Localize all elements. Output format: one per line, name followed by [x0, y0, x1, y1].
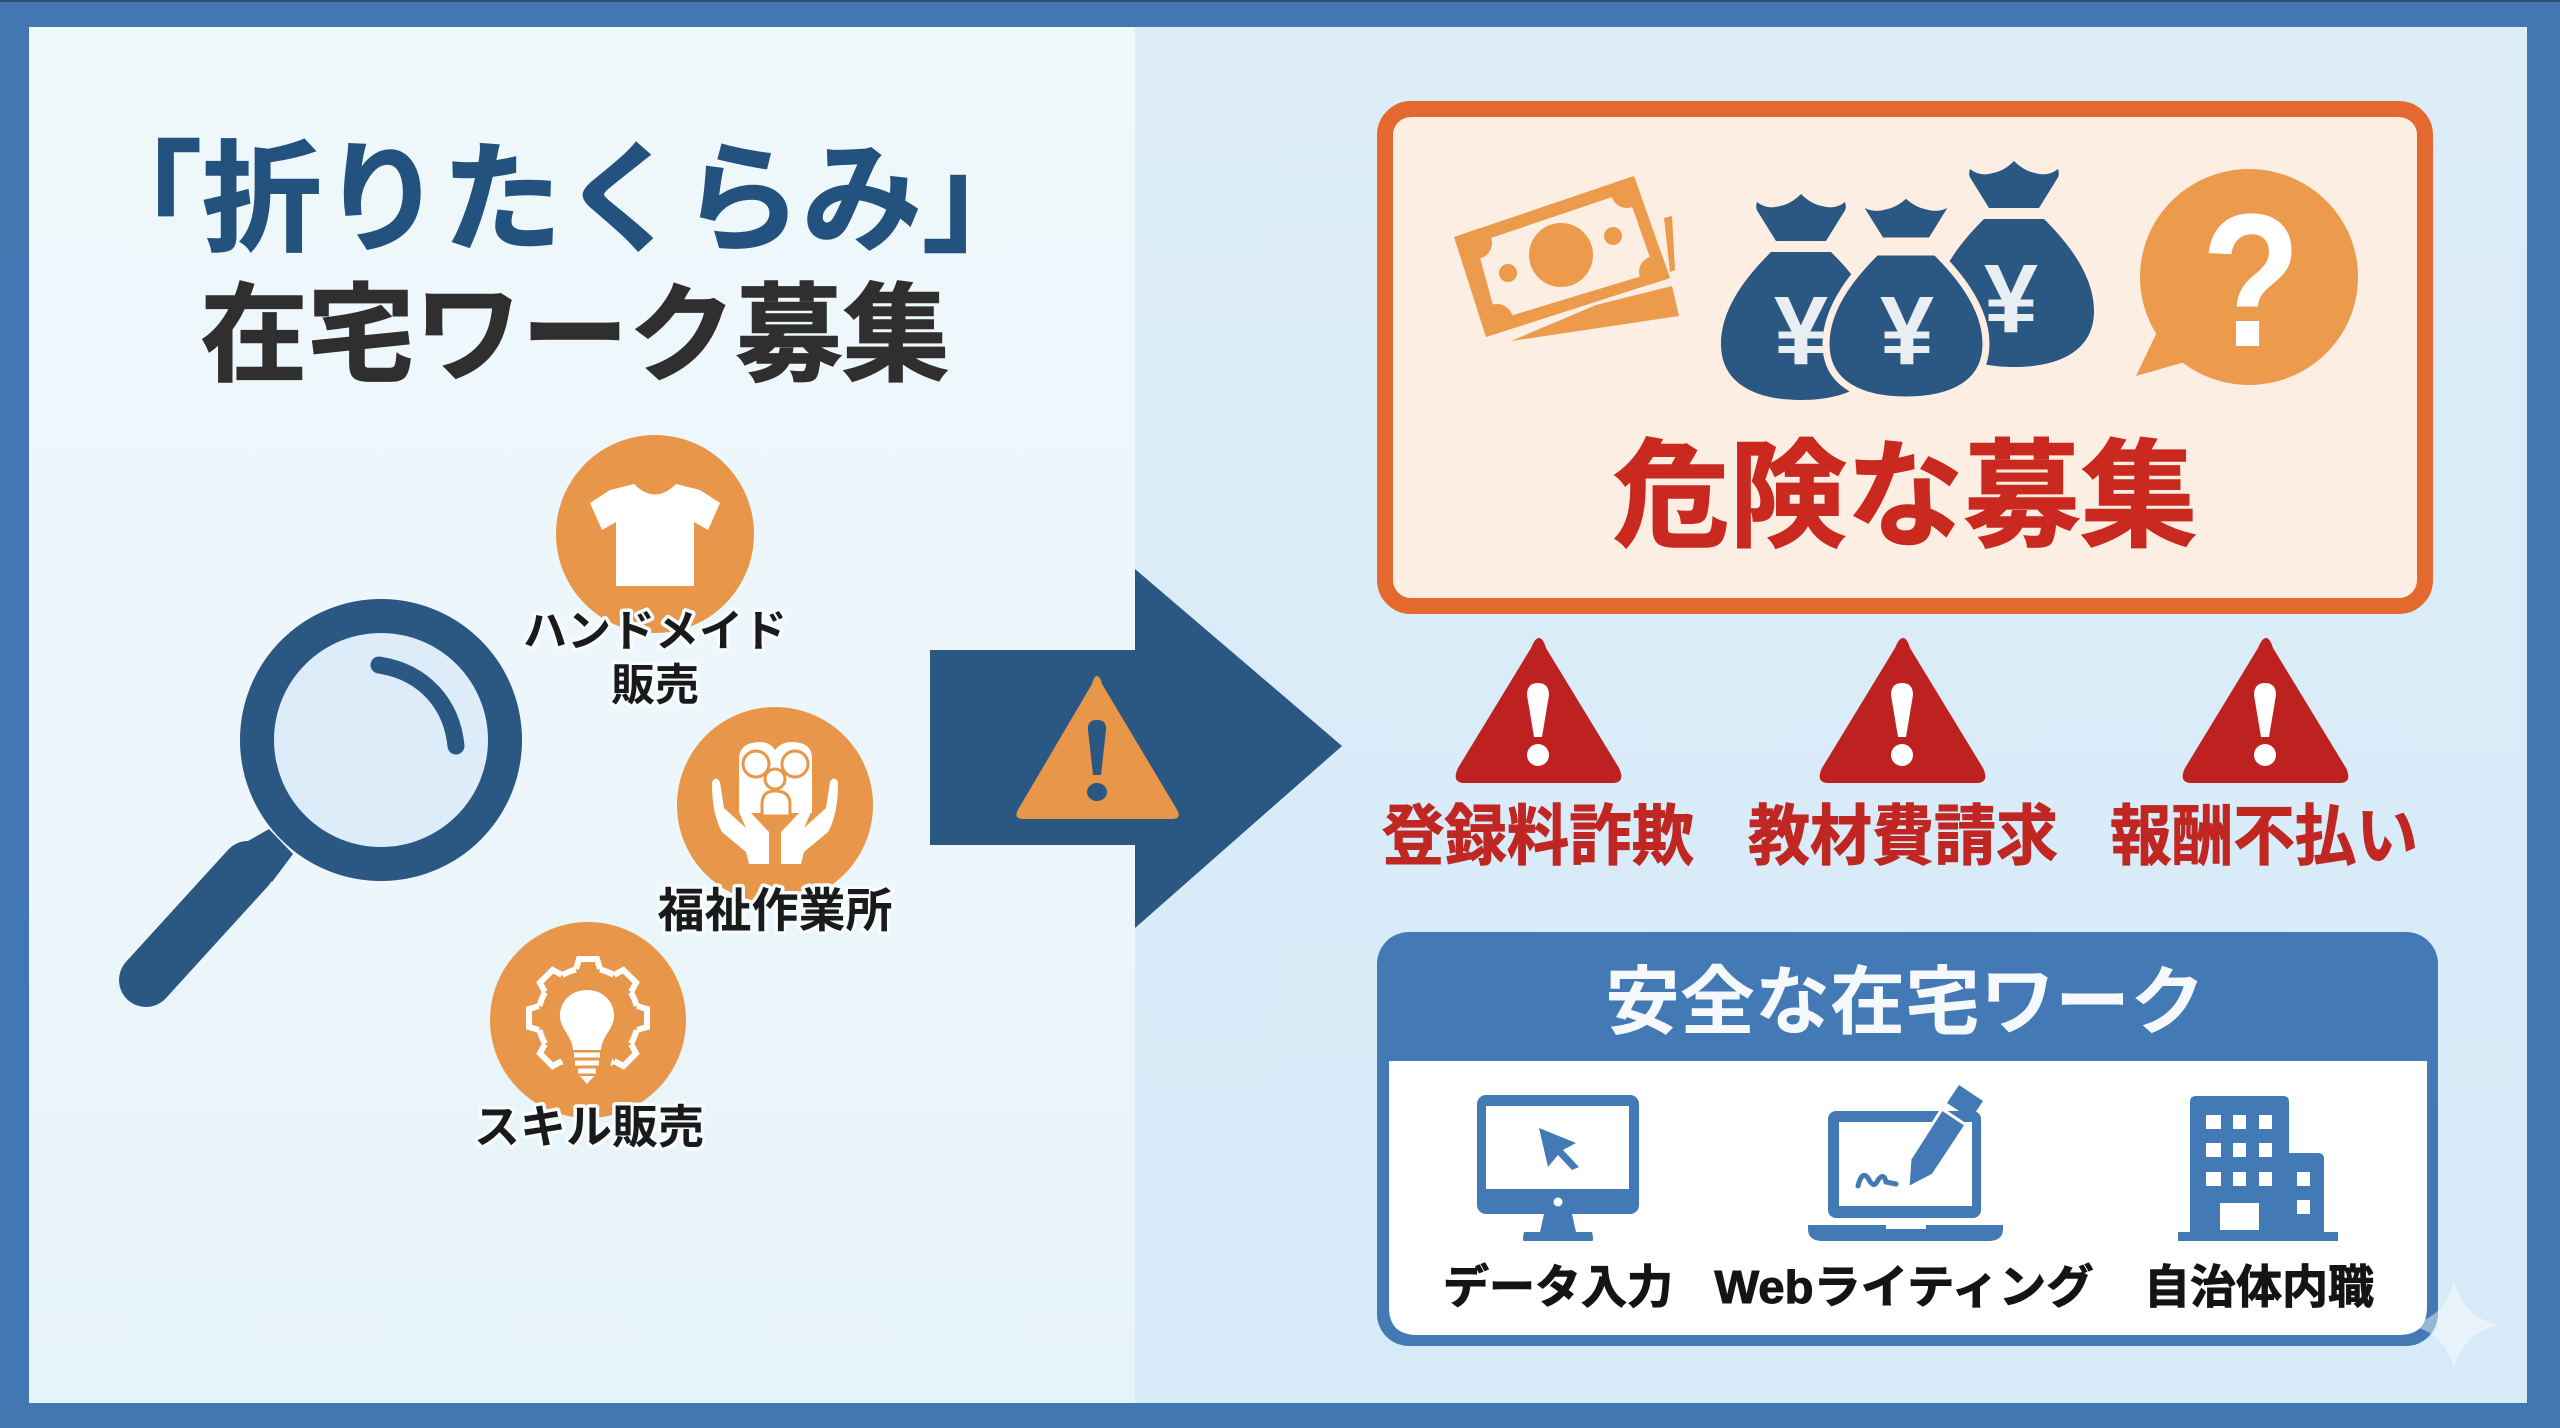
warning: teaching material charges [1748, 638, 2058, 873]
icon: yen money bags: ¥ [1880, 276, 1934, 385]
item: welfare workshop [658, 707, 892, 937]
item: skill sales: スキル販売 [474, 1101, 704, 1153]
heading: danger: 危険な募集 [1612, 431, 2198, 562]
icon: laptop with pencil [1808, 1085, 2003, 1241]
icon: banknotes [1454, 176, 1679, 341]
icon: yen money bags: ¥ [1984, 244, 2038, 353]
heading: safe: 安全な在宅ワーク [1605, 960, 2205, 1044]
icon: yen money bags: ¥ [1774, 276, 1828, 385]
item: handmade sales: ハンドメイド [523, 607, 787, 656]
item: handmade sales: 販売 [611, 661, 699, 710]
panel: dangerous recruitment [1385, 109, 2425, 606]
label: municipal job: 自治体内職 [2144, 1261, 2374, 1313]
label: data entry: データ入力 [1443, 1261, 1673, 1313]
warning: registration fee fraud: 登録料詐欺 [1382, 799, 1694, 873]
arrow [930, 569, 1342, 928]
item: welfare workshop: 福祉作業所 [658, 884, 892, 937]
icon: magnifying glass [146, 616, 505, 980]
label: web writing: Webライティング [1714, 1261, 2094, 1313]
panel: left search area [29, 27, 1135, 1403]
icon: yen money bags [1721, 161, 2094, 400]
icon: question bubble: ? [2201, 174, 2301, 387]
icon: warning on arrow [1016, 676, 1179, 819]
warning: registration fee fraud [1382, 638, 1694, 873]
title [82, 133, 1042, 395]
title: 在宅ワーク募集 [200, 275, 950, 395]
title: 「折りたくらみ」 [82, 133, 1042, 267]
warning: teaching material charges: 教材費請求 [1748, 799, 2058, 873]
item: handmade sales [523, 435, 787, 710]
warning: unpaid rewards [2110, 638, 2418, 873]
icon: question bubble [2136, 169, 2358, 387]
panel: right area [1135, 27, 2527, 1403]
warning: unpaid rewards: 報酬不払い [2110, 799, 2418, 873]
item: skill sales [474, 922, 704, 1153]
icon: office building [2178, 1096, 2338, 1241]
icon: sparkle watermark [2409, 1280, 2499, 1370]
panel: safe work [1377, 932, 2438, 1346]
icon: monitor [1477, 1095, 1639, 1241]
